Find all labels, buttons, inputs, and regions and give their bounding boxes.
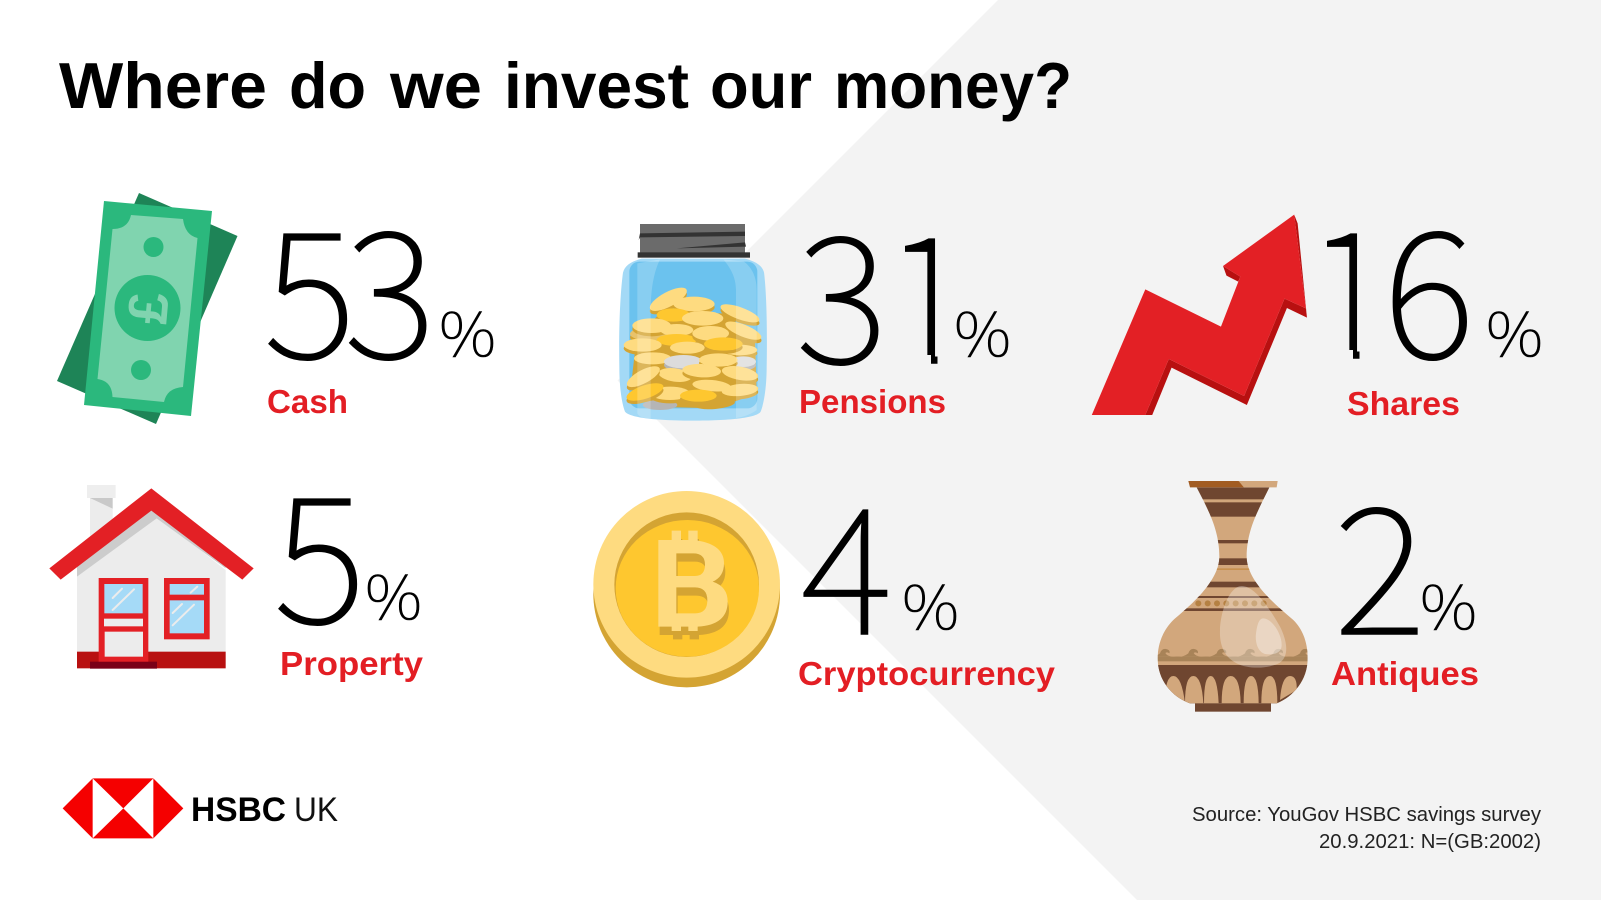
stat: 4%: % xyxy=(902,560,959,647)
stat: 31%: % xyxy=(954,287,1011,374)
title: we xyxy=(389,49,482,122)
background: grey chevron panel xyxy=(618,0,1601,900)
stat: 31%: 3 xyxy=(796,159,888,414)
icon: jar of coins xyxy=(619,224,767,421)
label: Antiques: Antiques xyxy=(1331,655,1479,692)
stat: 16% xyxy=(1327,231,1540,361)
title xyxy=(59,49,1072,122)
stat: 2% xyxy=(1334,430,1477,685)
stat: 53%: % xyxy=(439,287,496,374)
icon: house xyxy=(49,485,254,669)
title: our xyxy=(710,49,812,122)
panel: cryptocurrency xyxy=(593,430,1056,692)
panel: shares xyxy=(1092,214,1540,416)
stat: 5%: % xyxy=(365,550,422,637)
source note xyxy=(1192,804,1541,853)
stat: 5%: 5 xyxy=(274,419,366,674)
stat: 16%: 6 xyxy=(1383,154,1475,409)
title: Where xyxy=(59,49,267,122)
icon: banknotes xyxy=(57,193,238,424)
label: Cryptocurrency: Cryptocurrency xyxy=(798,655,1056,692)
stat: 4% xyxy=(801,430,959,685)
icon: rising arrow xyxy=(1092,215,1307,415)
source note: Source: YouGov HSBC savings survey xyxy=(1192,804,1541,826)
icon: vase xyxy=(1158,481,1308,712)
panel: pensions xyxy=(619,224,1008,421)
icon: HSBC hexagon xyxy=(63,778,183,838)
title: invest xyxy=(504,49,689,122)
stat: 2%: 2 xyxy=(1334,430,1426,685)
stat: 5% xyxy=(274,419,422,674)
stat: 53%: 5 xyxy=(264,154,356,409)
stat: 31% xyxy=(800,236,1008,366)
label: Cash: Cash xyxy=(267,383,348,420)
stat: 16%: % xyxy=(1486,287,1543,374)
panel: antiques xyxy=(1158,481,1478,712)
stat: 31%: 1 xyxy=(882,159,974,414)
panel: cash xyxy=(57,154,496,424)
logo wordmark: HSBC xyxy=(191,791,286,829)
stat: 4%: 4 xyxy=(801,430,893,685)
stat: 16%: 1 xyxy=(1304,154,1396,409)
title: do xyxy=(289,49,366,122)
logo wordmark: UK xyxy=(294,791,338,829)
icon: bitcoin coin xyxy=(593,491,780,687)
stat: 2%: % xyxy=(1420,560,1477,647)
source note: 20.9.2021: N=(GB:2002) xyxy=(1319,831,1541,853)
stat: 53%: 3 xyxy=(344,154,436,409)
logo wordmark xyxy=(191,791,338,829)
stat: 53% xyxy=(264,154,496,409)
icon: banknotes: £ xyxy=(115,290,181,326)
logo: HSBC UK xyxy=(63,778,338,838)
panel: property xyxy=(49,419,424,682)
label: Pensions: Pensions xyxy=(799,383,946,420)
label: Shares: Shares xyxy=(1347,385,1460,422)
title: money? xyxy=(834,49,1072,122)
label: Property: Property xyxy=(280,645,424,682)
